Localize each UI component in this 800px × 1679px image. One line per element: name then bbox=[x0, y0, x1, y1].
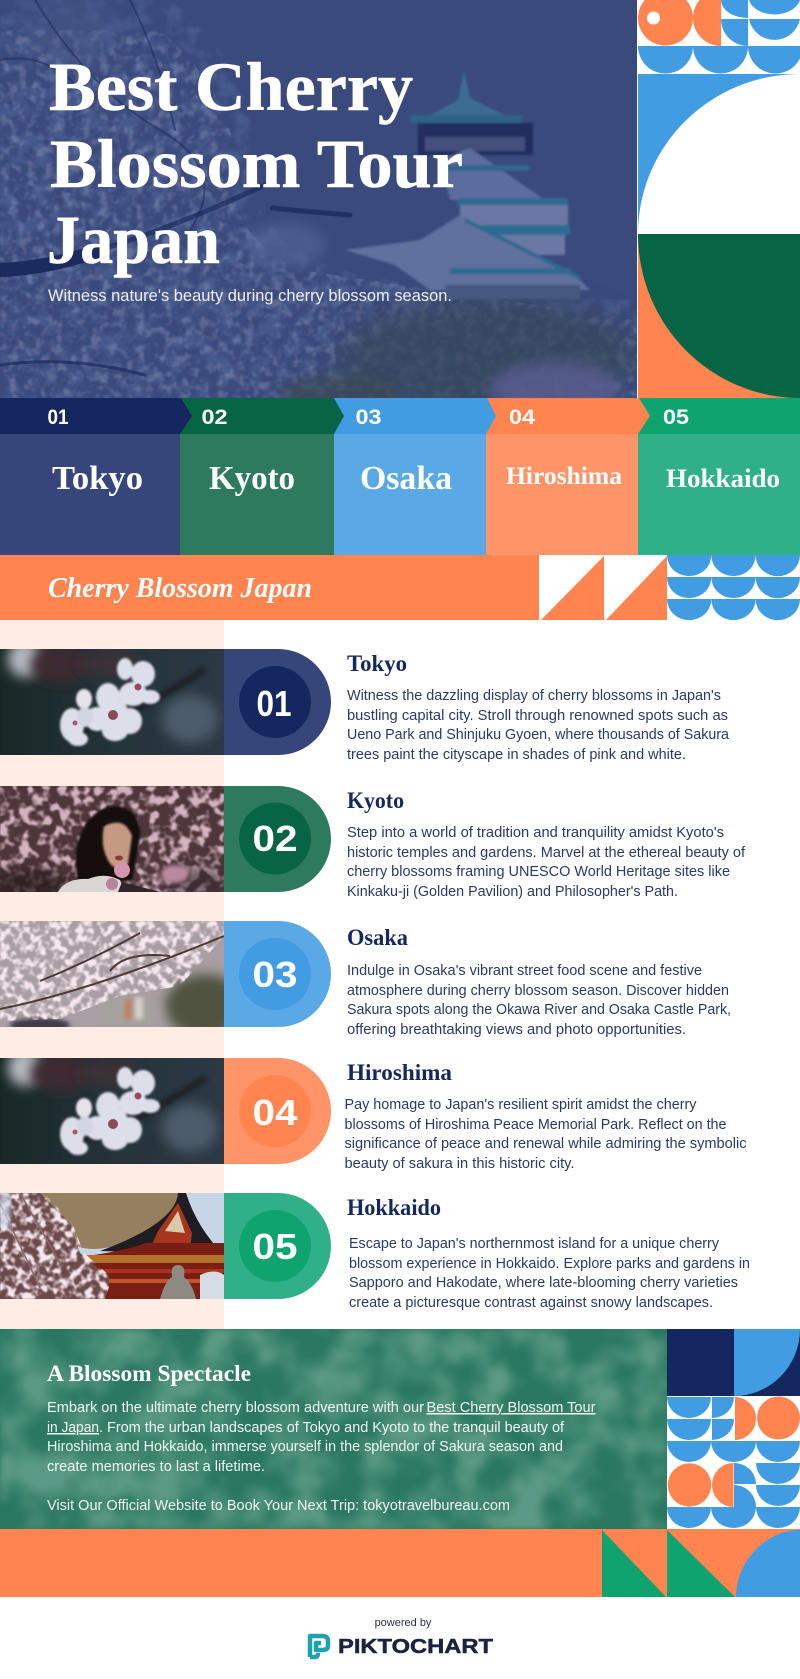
closing paragraph bbox=[47, 1399, 596, 1475]
top right geometric pattern bbox=[638, 0, 800, 398]
number pill: 03 bbox=[252, 954, 298, 995]
footer: powered by Piktochart: powered by bbox=[375, 1617, 432, 1629]
orange triangle tiles bbox=[541, 556, 667, 620]
number pill: 01 bbox=[256, 683, 292, 724]
footer: powered by Piktochart bbox=[310, 1617, 493, 1658]
photo: white blossoms bbox=[0, 641, 224, 755]
green triangles bbox=[602, 1530, 735, 1597]
photo: white blossoms bbox=[0, 1050, 224, 1164]
description: create a picturesque contrast against snowy landscapes. bbox=[349, 1294, 713, 1311]
description: trees paint the cityscape in shades of pink and white. bbox=[347, 746, 686, 763]
logo icon bbox=[310, 1636, 328, 1657]
description bbox=[347, 824, 746, 900]
logo wordmark: PIKTOCHART bbox=[338, 1636, 493, 1658]
closing paragraph: Best Cherry Blossom Tour bbox=[426, 1399, 596, 1416]
description bbox=[347, 687, 730, 763]
blue scallop pattern bbox=[667, 555, 800, 620]
description: blossoms of Hiroshima Peace Memorial Park. Reflect on the bbox=[344, 1116, 726, 1133]
description: Indulge in Osaka's vibrant street food scene and festive bbox=[347, 962, 702, 979]
column 05 Hokkaido bbox=[638, 398, 800, 555]
description: cherry blossoms framing UNESCO World Heritage sites like bbox=[347, 863, 730, 880]
number pill bbox=[224, 921, 331, 1027]
row: Hokkaido bbox=[0, 1193, 750, 1311]
row: Tokyo bbox=[0, 641, 730, 763]
column 04 Hiroshima: 04 bbox=[509, 406, 535, 429]
closing paragraph: . From the urban landscapes of Tokyo and Kyoto to the tranquil beauty of bbox=[99, 1419, 565, 1436]
number pill bbox=[224, 1058, 331, 1164]
description: Ueno Park and Shinjuku Gyoen, where thousands of Sakura bbox=[347, 726, 730, 743]
number pill: 02 bbox=[252, 818, 298, 859]
bottom right geometric pattern bbox=[667, 1329, 800, 1529]
section banner bbox=[0, 555, 800, 620]
closing panel bbox=[0, 1329, 667, 1529]
row: Hiroshima bbox=[0, 1050, 747, 1172]
castle bbox=[345, 70, 590, 299]
photo: woman among blossoms bbox=[0, 786, 225, 900]
description: Sakura spots along the Okawa River and Osaka Castle Park, bbox=[347, 1001, 731, 1018]
description: Step into a world of tradition and tranquility amidst Kyoto's bbox=[347, 824, 724, 841]
closing paragraph: Hiroshima and Hokkaido, immerse yourself in the splendor of Sakura season and bbox=[47, 1438, 563, 1455]
column 05 Hokkaido: 05 bbox=[663, 406, 689, 429]
blue quarter circle bbox=[736, 1530, 800, 1597]
description: Pay homage to Japan's resilient spirit amidst the cherry bbox=[344, 1096, 697, 1113]
banner heading: Cherry Blossom Japan bbox=[48, 573, 312, 604]
description: Escape to Japan's northernmost island for a unique cherry bbox=[349, 1235, 719, 1252]
description bbox=[344, 1096, 747, 1172]
city chevron strip bbox=[0, 398, 800, 555]
heading: Hokkaido bbox=[347, 1195, 441, 1220]
description: Kinkaku-ji (Golden Pavilion) and Philosopher's Path. bbox=[347, 883, 678, 900]
row: Osaka bbox=[0, 921, 731, 1038]
description: beauty of sakura in this historic city. bbox=[344, 1155, 574, 1172]
row: Kyoto bbox=[0, 786, 746, 900]
column 02 Kyoto: Kyoto bbox=[209, 460, 295, 497]
description: Witness the dazzling display of cherry blossoms in Japan's bbox=[347, 687, 721, 704]
title: Japan bbox=[47, 202, 220, 278]
description: atmosphere during cherry blossom season. Discover hidden bbox=[347, 982, 729, 999]
column 03 Osaka bbox=[334, 398, 496, 555]
closing paragraph: Embark on the ultimate cherry blossom adventure with our bbox=[47, 1399, 424, 1416]
column 04 Hiroshima bbox=[486, 398, 650, 555]
photo: red temple and blossoms bbox=[0, 1193, 224, 1299]
description: bustling capital city. Stroll through renowned spots such as bbox=[347, 707, 728, 724]
column 05 Hokkaido: Hokkaido bbox=[666, 464, 780, 493]
column 03 Osaka: 03 bbox=[356, 406, 382, 429]
column 02 Kyoto: 02 bbox=[202, 406, 228, 429]
column 03 Osaka: Osaka bbox=[360, 460, 452, 497]
number pill bbox=[224, 786, 331, 892]
subtitle: Witness nature's beauty during cherry blossom season. bbox=[48, 286, 452, 305]
description bbox=[347, 962, 731, 1038]
heading: Tokyo bbox=[347, 651, 407, 676]
hero photo: castle and cherry trees bbox=[0, 0, 640, 418]
description: Sapporo and Hakodate, where late-blooming cherry varieties bbox=[349, 1274, 738, 1291]
closing heading: A Blossom Spectacle bbox=[47, 1361, 251, 1386]
pink photo column bbox=[0, 620, 224, 1329]
column 01 Tokyo: 01 bbox=[48, 406, 69, 429]
number pill: 04 bbox=[252, 1092, 298, 1133]
closing paragraph: in Japan bbox=[47, 1419, 99, 1436]
photo: blossom branches bbox=[0, 921, 224, 1027]
number pill bbox=[224, 649, 331, 755]
heading: Kyoto bbox=[347, 788, 404, 813]
column 01 Tokyo: Tokyo bbox=[52, 460, 143, 497]
hero panel bbox=[0, 0, 640, 418]
photo background: green tinted blossoms bbox=[0, 1329, 667, 1529]
number pill: 05 bbox=[252, 1226, 298, 1267]
title: Best Cherry bbox=[49, 49, 413, 125]
number pill bbox=[224, 1193, 331, 1299]
description: significance of peace and renewal while admiring the symbolic bbox=[344, 1135, 747, 1152]
heading: Osaka bbox=[347, 925, 408, 950]
description: historic temples and gardens. Marvel at the ethereal beauty of bbox=[347, 844, 746, 861]
bottom orange band bbox=[0, 1529, 800, 1597]
title bbox=[47, 49, 463, 278]
description: offering breathtaking views and photo opportunities. bbox=[347, 1021, 686, 1038]
description bbox=[349, 1235, 750, 1311]
heading: Hiroshima bbox=[347, 1060, 452, 1085]
column 02 Kyoto bbox=[180, 398, 344, 555]
closing paragraph: create memories to last a lifetime. bbox=[47, 1458, 265, 1475]
orange circle with hole bbox=[638, 0, 693, 46]
column 01 Tokyo bbox=[0, 398, 192, 555]
description: blossom experience in Hokkaido. Explore parks and gardens in bbox=[349, 1255, 750, 1272]
call to action: Visit Our Official Website to Book Your Next Trip: tokyotravelbureau.com bbox=[47, 1497, 510, 1514]
title: Blossom Tour bbox=[50, 126, 463, 202]
column 04 Hiroshima: Hiroshima bbox=[506, 463, 622, 490]
